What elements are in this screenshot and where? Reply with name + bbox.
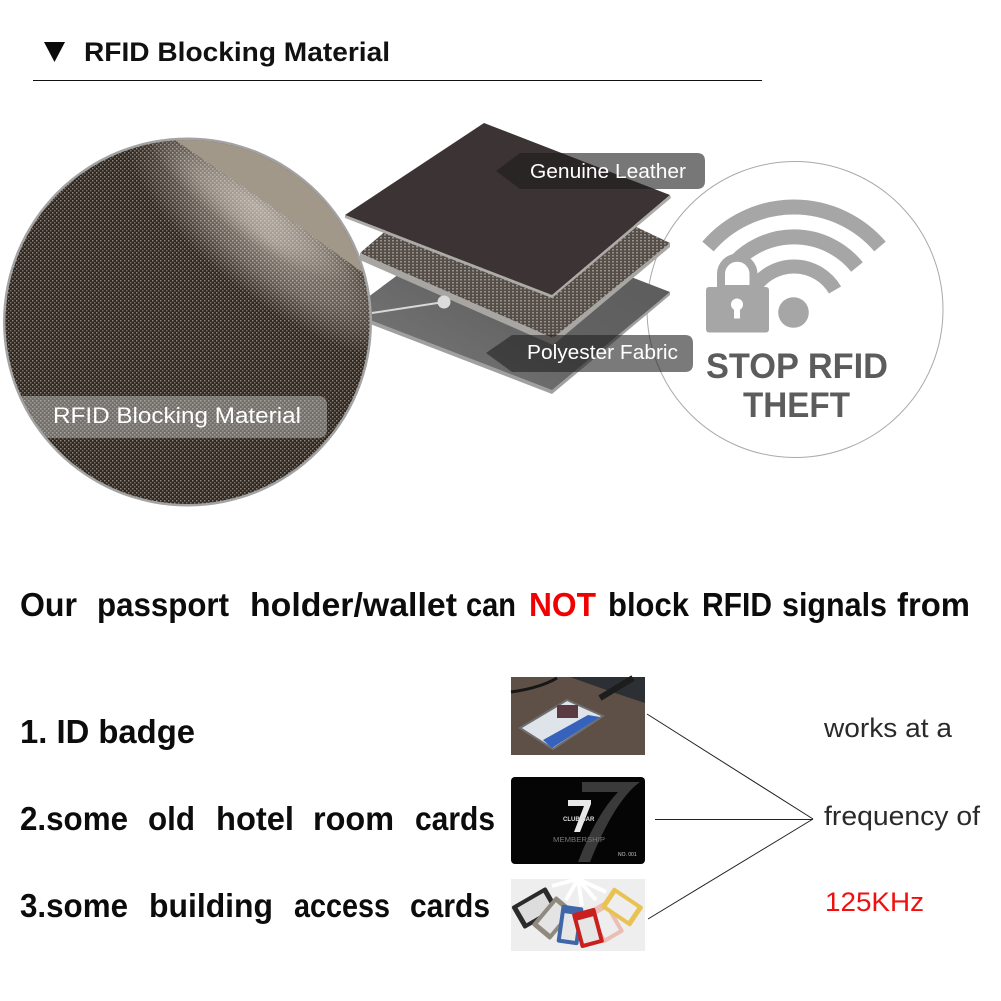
statement: cannot block signals: [20, 586, 970, 623]
folded back cloth: [176, 140, 362, 272]
illustration: layered wallet materials: [345, 123, 671, 394]
statement: cannot block signals: passport: [97, 586, 229, 623]
list item: hotel room cards: old: [148, 800, 195, 837]
label: Polyester Fabric: [486, 335, 693, 372]
photo: colourful badge holders: [511, 879, 645, 951]
text: frequency of: frequency of: [824, 801, 981, 831]
statement: cannot block signals: can: [466, 586, 516, 623]
list item: hotel room cards: 2.some: [20, 800, 128, 837]
label: RFID Blocking Material: RFID Blocking Material: [53, 403, 301, 428]
photo: black membership card: CLUB BAR: [563, 817, 595, 823]
heading: RFID Blocking Material: RFID Blocking Material: [84, 37, 390, 67]
statement: cannot block signals: NOT: [529, 586, 596, 623]
layer: RFID blocking mesh sheet: [360, 152, 670, 345]
text: STOP RFID THEFT: [706, 347, 888, 425]
photo: ID badge on table: [511, 677, 645, 755]
connector lines: [647, 714, 813, 919]
panel: stop RFID theft circle: [647, 162, 943, 458]
list item: hotel room cards: hotel: [216, 800, 294, 837]
list item: hotel room cards: [20, 800, 495, 837]
statement: cannot block signals: from: [897, 586, 970, 623]
panel: RFID blocking material magnified circle: [3, 138, 372, 506]
list item: building access cards: building: [149, 887, 273, 924]
icon: padlock: [706, 258, 769, 332]
list item: building access cards: 3.some: [20, 887, 128, 924]
list item: building access cards: cards: [410, 887, 490, 924]
text: STOP RFID THEFT: THEFT: [743, 386, 850, 425]
text: works at a: works at a: [823, 713, 953, 743]
text: STOP RFID THEFT: STOP RFID: [706, 347, 888, 386]
layer: genuine leather sheet: [345, 123, 671, 298]
statement: cannot block signals: block: [608, 586, 690, 623]
layer: polyester fabric sheet: [360, 217, 670, 394]
statement: cannot block signals: signals: [782, 586, 887, 623]
photo: black membership card: MEMBERSHIP: [553, 837, 605, 844]
heading: RFID Blocking Material: [33, 37, 762, 81]
statement: cannot block signals: RFID: [702, 586, 772, 623]
statement: cannot block signals: Our: [20, 586, 77, 623]
statement: cannot block signals: holder/wallet: [250, 586, 457, 623]
text: 125KHz: 125KHz: [825, 887, 924, 917]
list item: hotel room cards: cards: [415, 800, 495, 837]
label: Genuine Leather: [496, 153, 705, 189]
photo: black membership card: NO. 001: [618, 852, 637, 858]
list item: ID badge: 1. ID badge: [20, 713, 195, 750]
list item: building access cards: access: [294, 887, 390, 924]
label: Polyester Fabric: Polyester Fabric: [527, 342, 678, 364]
icon: wifi signal arcs: [708, 207, 880, 328]
photo: black membership card: [511, 777, 645, 864]
callout dot and leader line: [372, 296, 450, 313]
list item: hotel room cards: room: [313, 800, 394, 837]
list item: building access cards: [20, 887, 490, 924]
label: Genuine Leather: Genuine Leather: [530, 161, 686, 183]
label: RFID Blocking Material: [20, 396, 327, 438]
